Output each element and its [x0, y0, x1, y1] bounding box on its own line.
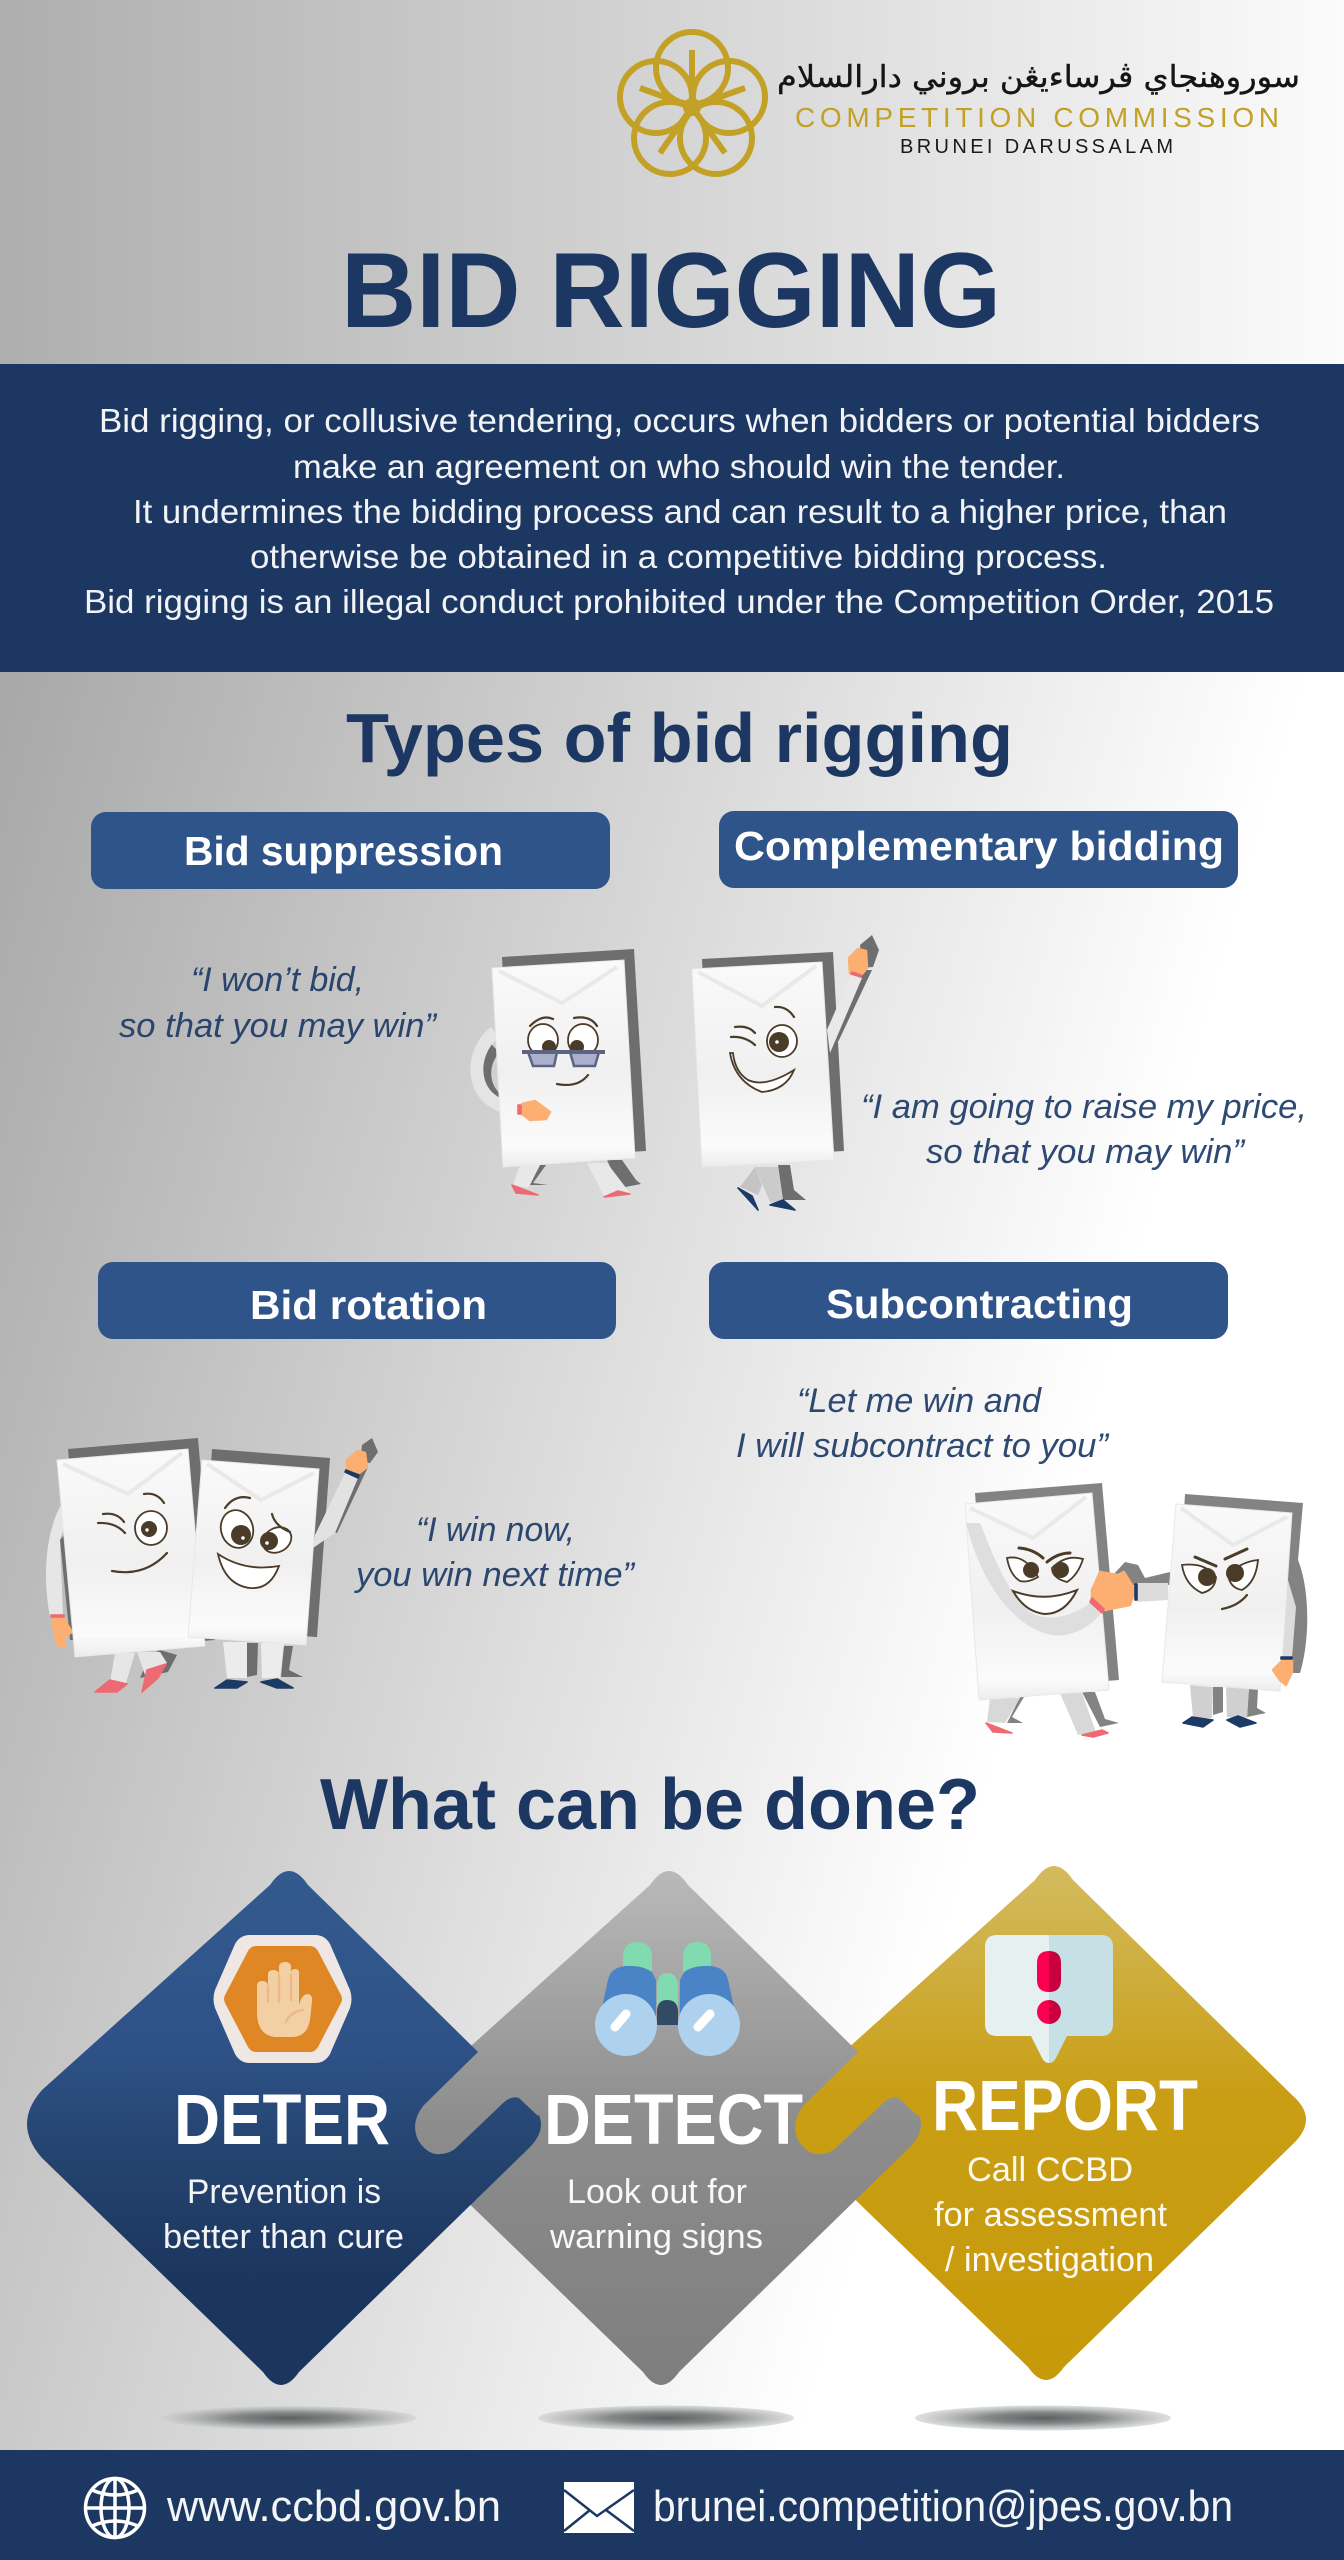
quote: subcontracting — [736, 1382, 1110, 1465]
character pair: subcontracting envelopes — [965, 1483, 1307, 1737]
icon: globe — [85, 2478, 145, 2538]
label: bid suppression — [91, 812, 610, 889]
text: report: Call CCBD — [967, 2151, 1133, 2189]
logo text: COMPETITION COMMISSION — [795, 102, 1279, 133]
title: BID RIGGING — [341, 230, 1001, 350]
definition text: Bid rigging, or collusive tendering, occurs when bidders or potential bidders — [99, 402, 1260, 439]
label: subcontracting: Subcontracting — [826, 1281, 1133, 1327]
panel: report diamond — [792, 1866, 1306, 2380]
icon: stop hand hexagon — [214, 1935, 352, 2063]
definition text: Bid rigging is an illegal conduct prohibited under the Competition Order, 2015 — [84, 583, 1274, 620]
text: deter: Prevention is — [187, 2173, 381, 2211]
quote: bid suppression: so that you may win” — [119, 1007, 438, 1045]
quote: subcontracting: I will subcontract to you” — [736, 1427, 1110, 1465]
text: deter: better than cure — [163, 2218, 404, 2256]
text: report: / investigation — [945, 2241, 1154, 2279]
text: deter: DETER — [174, 2081, 390, 2160]
icon: gold rosette emblem — [620, 32, 765, 174]
definition text: It undermines the bidding process and can result to a higher price, than — [133, 493, 1227, 530]
ground shadows — [160, 2406, 1171, 2430]
character: winking envelope waving — [692, 935, 879, 1210]
icon: speech bubble alert — [985, 1935, 1113, 2063]
panel: report puzzle tab — [795, 2050, 940, 2154]
label: bid suppression: Bid suppression — [184, 828, 503, 874]
quote: complementary bidding: so that you may win” — [926, 1133, 1246, 1171]
definition text — [84, 402, 1274, 620]
text: report — [932, 2067, 1198, 2279]
text: report: REPORT — [932, 2067, 1198, 2146]
panel: detect puzzle tab — [415, 2050, 560, 2154]
quote: complementary bidding — [861, 1088, 1307, 1171]
label: complementary bidding — [719, 811, 1238, 888]
heading: types of bid rigging: Types of bid rigging — [346, 699, 1013, 777]
quote: bid suppression — [119, 961, 438, 1045]
text: website: www.ccbd.gov.bn — [166, 2482, 501, 2531]
label: complementary bidding: Complementary bidding — [734, 823, 1224, 869]
quote: bid suppression: “I won’t bid, — [191, 961, 364, 999]
text: deter — [163, 2081, 404, 2256]
definition text: make an agreement on who should win the tender. — [293, 448, 1065, 485]
heading: what can be done: What can be done? — [320, 1765, 980, 1845]
icon: binoculars — [595, 1942, 740, 2056]
quote: bid rotation: “I win now, — [416, 1511, 575, 1549]
icon: envelope — [564, 2482, 634, 2533]
label: bid rotation: Bid rotation — [250, 1282, 487, 1328]
panel: detect diamond — [407, 1871, 921, 2385]
text: report: for assessment — [934, 2196, 1168, 2234]
quote: bid rotation — [354, 1511, 636, 1594]
panel: deter diamond — [27, 1871, 541, 2385]
text: detect — [544, 2081, 803, 2256]
panel: footer contact bar — [0, 2450, 1344, 2560]
quote: bid rotation: you win next time” — [354, 1556, 636, 1594]
label: subcontracting — [709, 1262, 1228, 1339]
logo: Competition Commission Brunei Darussalam — [620, 32, 1300, 174]
text: detect: DETECT — [544, 2081, 803, 2160]
panel: definition band — [0, 364, 1344, 672]
character: glasses envelope — [477, 949, 646, 1197]
main background — [0, 671, 1344, 2451]
definition text: otherwise be obtained in a competitive bidding process. — [250, 538, 1107, 575]
text: detect: Look out for — [567, 2173, 747, 2211]
quote: complementary bidding: “I am going to raise my price, — [861, 1088, 1307, 1126]
quote: subcontracting: “Let me win and — [797, 1382, 1042, 1420]
text: email: brunei.competition@jpes.gov.bn — [653, 2482, 1233, 2531]
header background — [0, 0, 1344, 365]
character pair: bid rotation envelopes — [46, 1438, 378, 1692]
text: detect: warning signs — [549, 2218, 763, 2256]
label: bid rotation — [98, 1262, 616, 1339]
logo text: سوروهنجاي ڤرساءيڠن بروني دارالسلام — [777, 60, 1300, 95]
logo text — [777, 60, 1300, 158]
logo text: BRUNEI DARUSSALAM — [900, 136, 1173, 158]
